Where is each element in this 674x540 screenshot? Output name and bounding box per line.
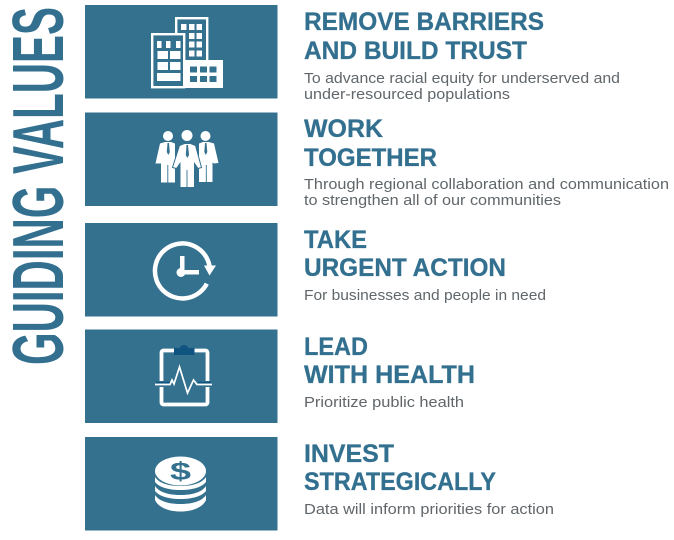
heading: remove barriers: REMOVE BARRIERS bbox=[304, 8, 544, 36]
text: urgent action description: For businesses and people in need bbox=[304, 287, 546, 304]
text: work together description: to strengthen all of our communities bbox=[304, 192, 561, 209]
heading: invest strategically: STRATEGICALLY bbox=[304, 468, 496, 496]
heading: take urgent action bbox=[304, 226, 506, 282]
icon: clock with arrow bbox=[155, 243, 216, 298]
panel: invest strategically icon box bbox=[85, 437, 278, 530]
heading: invest strategically bbox=[304, 440, 496, 496]
heading: work together bbox=[304, 115, 437, 172]
panel: remove barriers icon box bbox=[85, 5, 278, 98]
text: remove barriers description bbox=[304, 70, 620, 103]
icon: three people bbox=[156, 130, 218, 188]
heading: lead with health bbox=[304, 333, 475, 389]
icon: coin stack: $ bbox=[170, 458, 191, 486]
heading: remove barriers: AND BUILD TRUST bbox=[304, 37, 527, 65]
text: invest strategically description: Data will inform priorities for action bbox=[304, 501, 554, 518]
heading: take urgent action: URGENT ACTION bbox=[304, 254, 506, 282]
text: work together description: Through regional collaboration and communication bbox=[304, 176, 669, 193]
panel: lead with health icon box bbox=[85, 330, 278, 423]
heading: invest strategically: INVEST bbox=[304, 440, 394, 468]
text: work together description bbox=[304, 176, 669, 209]
text: remove barriers description: To advance racial equity for underserved and bbox=[304, 70, 620, 87]
heading: work together: WORK bbox=[304, 115, 383, 143]
heading: take urgent action: TAKE bbox=[304, 226, 367, 254]
heading: lead with health: LEAD bbox=[304, 333, 368, 361]
text: lead with health description: Prioritize public health bbox=[304, 394, 464, 411]
panel: urgent action icon box bbox=[85, 223, 278, 316]
icon: clipboard with heartbeat bbox=[155, 345, 212, 404]
panel: work together icon box bbox=[85, 112, 278, 206]
heading: remove barriers bbox=[304, 8, 544, 65]
icon: buildings bbox=[152, 18, 223, 88]
icon: coin stack bbox=[155, 456, 206, 512]
text: remove barriers description: under-resourced populations bbox=[304, 86, 510, 103]
heading: work together: TOGETHER bbox=[304, 144, 437, 172]
heading: lead with health: WITH HEALTH bbox=[304, 361, 475, 389]
